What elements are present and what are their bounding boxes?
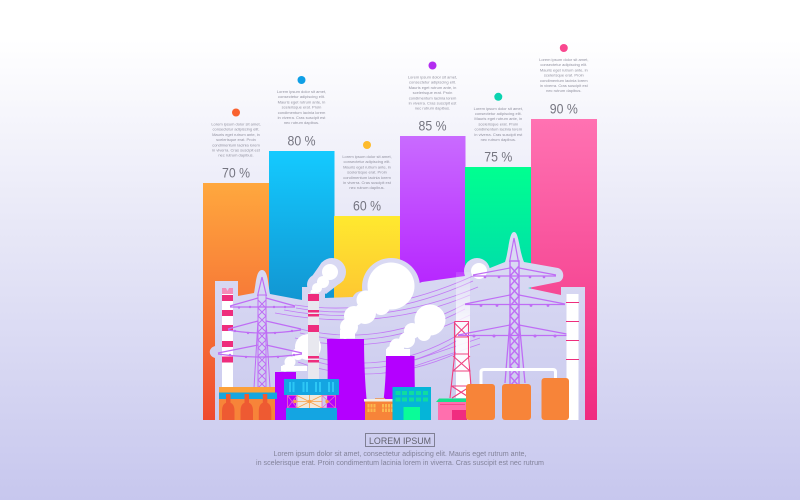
column 80 percent: marker and text: consectetur adipiscing elit. [278,94,325,99]
red lattice tower [450,322,472,398]
bar: 90 percent [531,119,597,420]
small orange building [364,398,397,420]
column 90 percent: marker and text: scelerisque erat. Proin [544,73,584,78]
column 90 percent: marker and text: consectetur adipiscing elit. [540,62,587,67]
column 75 percent: marker and text: nec rutrum dapibus. [481,137,516,142]
industrial silhouette backdrop [210,232,585,420]
column 75 percent: marker and text: scelerisque erat. Proin [478,121,518,126]
cloud: small cooling tower [386,304,446,356]
power lines [275,276,480,374]
small cooling tower [381,356,416,420]
column 85 percent: marker and text: consectetur adipiscing elit. [409,80,456,85]
column 90 percent: marker and text: Lorem ipsum dolor sit amet, [539,57,588,62]
caption text: Lorem ipsum dolor sit amet, consectetur adipiscing elit. Mauris eget rutrum ante, [274,449,526,458]
column 90 percent: marker and text [539,44,589,116]
column 80 percent: marker and text: nec rutrum dapibus. [284,120,319,125]
left pylon [218,277,302,388]
right chimney [566,294,579,420]
small purple block [275,372,296,420]
bar: 70 percent [203,183,269,420]
column 85 percent: marker and text: Lorem ipsum dolor sit amet, [408,74,457,80]
bar: 60 percent [334,216,400,420]
column 70 percent: marker and text: scelerisque erat. Proin [216,137,256,142]
column 70 percent: marker and text: nec rutrum dapibus. [218,153,254,158]
column 60 percent: marker and text: Mauris eget rutrum ante, in [343,164,391,169]
column 60 percent: marker and text: 60 % [353,198,381,214]
column 60 percent: marker and text: consectetur adipiscing elit. [344,159,390,164]
column 85 percent: marker and text: in viverra. Cras suscipit est [409,100,457,106]
caption [256,434,544,467]
column 85 percent: marker and text: Mauris eget rutrum ante, in [409,85,456,90]
column 85 percent: marker and text [408,62,457,134]
column 75 percent: marker and text: Lorem ipsum dolor sit amet, [474,106,523,111]
column 90 percent: marker and text: condimentum lacinia lorem [540,78,588,83]
caption text: in scelerisque erat. Proin condimentum lacinia lorem in viverra. Cras suscipit est nec rutrum [256,458,544,467]
column 60 percent: marker and text: scelerisque erat. Proin [347,170,387,175]
cloud: low chimney [281,334,321,372]
blue lattice building [284,379,339,420]
column 70 percent: marker and text: in viverra. Cras suscipit est [212,148,261,152]
column 75 percent: marker and text: Mauris eget rutrum ante, in [474,116,522,121]
orange tanks [466,378,569,420]
cloud: right stack [471,263,487,279]
column 75 percent: marker and text: consectetur adipiscing elit. [475,111,522,116]
smokestack behind red tower [456,272,470,398]
column 70 percent: marker and text: Mauris eget rutrum ante, in [212,132,260,137]
column 90 percent: marker and text: in viverra. Cras suscipit est [540,83,589,88]
column 60 percent: marker and text [342,141,392,214]
column 85 percent: marker and text: 85 % [418,118,446,134]
bar: 80 percent [269,151,334,420]
caption heading box: LOREM IPSUM [369,436,431,447]
column 60 percent: marker and text: Lorem ipsum dolor sit amet, [342,154,392,159]
column 60 percent: marker and text: in viverra. Cras suscipit est [343,180,392,185]
column 60 percent: marker and text: condimentum lacinia lorem [343,175,391,180]
right pylon [458,238,572,386]
smoke clouds [281,262,487,372]
bar chart [203,119,597,420]
column 80 percent: marker and text: scelerisque erat. Proin [282,105,321,110]
column 85 percent: marker and text: condimentum lacinia lorem [409,95,457,100]
column 80 percent: marker and text: condimentum lacinia lorem [278,110,326,115]
column 80 percent: marker and text: Mauris eget rutrum ante, in [278,99,325,104]
white pipe [481,370,556,384]
column 90 percent: marker and text: 90 % [550,102,578,116]
column 75 percent: marker and text [474,93,523,164]
column 80 percent: marker and text [277,76,326,148]
left orange building [219,387,277,420]
column 85 percent: marker and text: nec rutrum dapibus. [415,106,450,111]
column 70 percent: marker and text: Lorem ipsum dolor sit amet, [211,122,261,126]
column 80 percent: marker and text: in viverra. Cras suscipit est [278,115,326,120]
bar: 85 percent [400,136,466,420]
column 75 percent: marker and text: condimentum lacinia lorem [475,127,523,132]
cloud: upper chimney [310,264,338,294]
column 60 percent: marker and text: nec rutrum dapibus. [349,185,385,190]
centre chimney [308,293,319,400]
column 70 percent: marker and text: consectetur adipiscing elit. [213,127,259,132]
large cooling tower [326,339,369,420]
column 90 percent: marker and text: Mauris eget rutrum ante, in [540,67,588,72]
bar: 75 percent [465,167,531,420]
column 75 percent: marker and text: 75 % [484,150,512,164]
column 80 percent: marker and text: 80 % [288,134,316,148]
cloud: large cooling tower [340,262,414,339]
pink building [436,398,467,420]
column 70 percent: marker and text [211,108,261,180]
column 80 percent: marker and text: Lorem ipsum dolor sit amet, [277,89,326,94]
column 70 percent: marker and text: 70 % [222,166,250,180]
teal building [392,387,431,420]
column 90 percent: marker and text: nec rutrum dapibus. [546,88,581,93]
column 85 percent: marker and text: scelerisque erat. Proin [413,90,452,95]
left chimney [222,288,233,389]
column 70 percent: marker and text: condimentum lacinia lorem [212,142,260,147]
column 75 percent: marker and text: in viverra. Cras suscipit est [474,132,523,137]
